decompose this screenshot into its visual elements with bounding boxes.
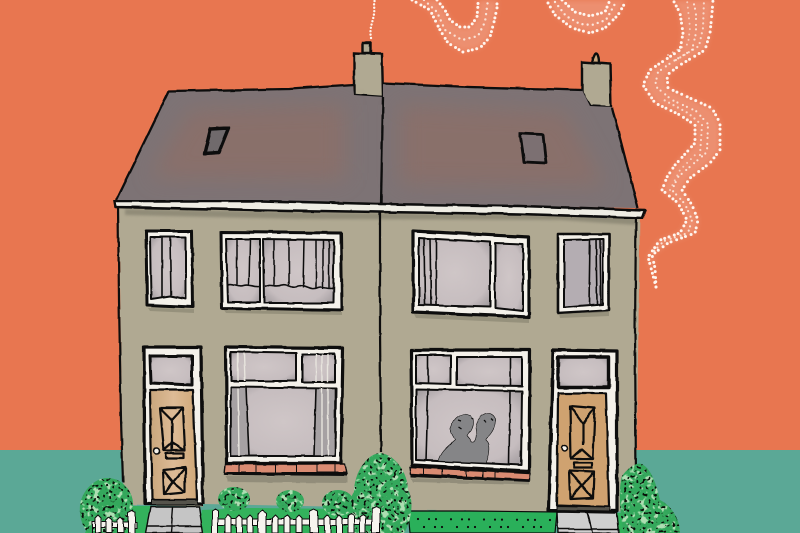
door step <box>151 500 198 505</box>
roof window: left skylight <box>204 128 229 154</box>
window: upper left small <box>146 231 193 307</box>
chimney: left <box>354 43 383 97</box>
roof outline <box>116 83 638 208</box>
roof window: right skylight <box>520 133 546 163</box>
door frame <box>144 347 203 504</box>
window shadow: upper middle left <box>224 310 342 315</box>
bush: right tall <box>620 464 680 533</box>
lawn: right of path <box>617 513 680 533</box>
smoke: right chimney plume <box>643 0 720 287</box>
chimney: right <box>582 53 611 107</box>
teal strip below left house wall <box>203 504 350 512</box>
lawn: right <box>408 511 557 533</box>
door knob <box>154 448 160 454</box>
bush: small one <box>218 487 250 511</box>
smoke: middle loop <box>412 0 497 52</box>
window: lower left <box>226 347 343 463</box>
door knob <box>562 445 568 451</box>
door panels <box>160 408 185 494</box>
fence: left <box>92 510 137 533</box>
window: upper far right <box>558 234 609 313</box>
window sill: lower right <box>410 467 530 485</box>
lawn speckles <box>418 519 552 527</box>
smoke: left chimney wisp <box>370 0 375 38</box>
door: right with transom <box>549 350 617 511</box>
smoke plumes <box>370 0 720 287</box>
roof warm shading <box>150 105 605 186</box>
door panels <box>569 406 595 499</box>
teal ground band <box>0 450 800 533</box>
door leaf <box>557 393 609 507</box>
window shadow: upper middle right <box>414 314 529 323</box>
smoke: top loop <box>548 0 625 33</box>
window: upper middle right <box>413 231 529 317</box>
bush: small three <box>322 490 354 516</box>
roof fill <box>116 83 638 208</box>
window shadow: upper left small <box>148 308 194 313</box>
transom window <box>150 356 192 385</box>
bush: small two <box>276 490 304 512</box>
transom window <box>558 357 609 387</box>
front garden <box>80 453 680 533</box>
window: lower right with two figures <box>411 350 530 471</box>
figures in window <box>438 413 496 463</box>
garden path: left <box>146 507 203 533</box>
window shadow: upper far right <box>559 311 609 318</box>
eave <box>114 201 645 218</box>
wall outlines <box>118 208 636 482</box>
window: upper middle left with lace curtains <box>221 232 342 310</box>
window sill: lower left <box>225 464 347 483</box>
door leaf <box>150 390 197 500</box>
house: shared building <box>114 43 645 512</box>
bush: far left <box>80 478 133 533</box>
walls <box>119 205 640 512</box>
bush: large centre <box>349 453 411 533</box>
lawn: centre <box>198 508 400 533</box>
roof <box>114 83 645 218</box>
wall shadow under eave <box>125 209 636 225</box>
garden path: right <box>557 512 619 533</box>
fence: centre <box>212 506 380 533</box>
lawn: left <box>85 506 151 533</box>
door step <box>557 506 610 511</box>
door: left with transom <box>144 347 203 505</box>
door frame <box>549 350 617 511</box>
